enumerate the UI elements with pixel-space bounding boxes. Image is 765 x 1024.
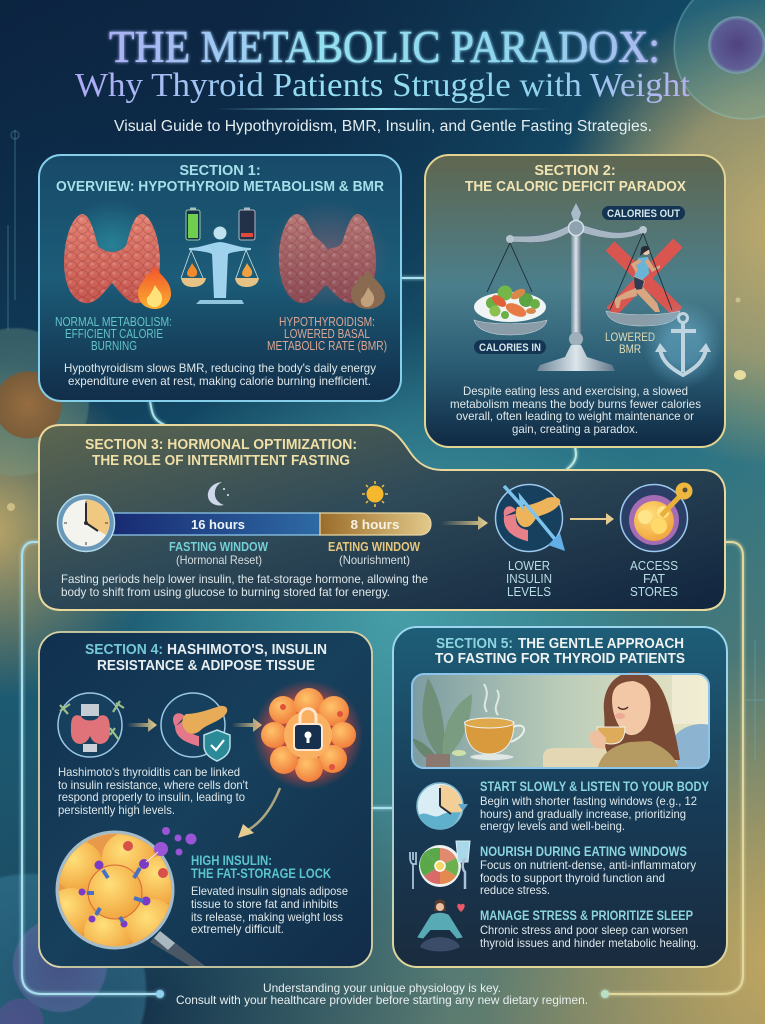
callout: high insulin: THE FAT-STORAGE LOCK bbox=[191, 866, 331, 881]
section 4 body text: to insulin resistance, where cells don't bbox=[58, 778, 249, 792]
title: Why Thyroid Patients Struggle with Weight bbox=[75, 67, 691, 104]
section 2 body text: overall, often leading to weight maintenance or bbox=[456, 409, 694, 423]
arrow bbox=[232, 718, 262, 732]
illustration: woman sipping tea bbox=[412, 672, 709, 768]
text: manage stress: thyroid issues and hinder metabolic healing. bbox=[480, 936, 699, 950]
section 2 body text: metabolism means the body burns fewer calories bbox=[450, 397, 701, 411]
panel: section 3 intermittent fasting bbox=[39, 425, 725, 610]
text: nourish: Focus on nutrient-dense, anti-inflammatory bbox=[480, 858, 696, 872]
section 4 heading: RESISTANCE & ADIPOSE TISSUE bbox=[97, 658, 315, 674]
label: lower insulin levels: LEVELS bbox=[507, 584, 551, 599]
text: manage stress bbox=[480, 908, 699, 950]
section 4 heading: HASHIMOTO'S, INSULIN bbox=[167, 642, 327, 658]
footer note bbox=[176, 981, 588, 1007]
label: lower insulin levels: INSULIN bbox=[506, 571, 552, 586]
text: start slowly bbox=[480, 779, 709, 833]
section 5 heading: TO FASTING FOR THYROID PATIENTS bbox=[435, 651, 685, 667]
plant bbox=[412, 678, 472, 768]
arrow: curved down to lens bbox=[238, 788, 280, 838]
footer note: Understanding your unique physiology is key. bbox=[263, 981, 501, 995]
label: fasting window bbox=[169, 540, 268, 567]
text: nourish: NOURISH DURING EATING WINDOWS bbox=[480, 844, 687, 859]
icon: pancreas with falling arrow bbox=[496, 484, 565, 552]
icon: salad bowl bbox=[474, 286, 546, 322]
label: lowered bmr: BMR bbox=[619, 342, 641, 356]
icon: meditation with heart bbox=[418, 900, 465, 952]
label: hypothyroidism: METABOLIC RATE (BMR) bbox=[267, 339, 387, 353]
panel: section 5 gentle approach bbox=[393, 627, 727, 967]
label: access fat stores: ACCESS bbox=[630, 558, 678, 573]
section 4 heading: SECTION 4: bbox=[85, 642, 163, 658]
text: manage stress: Chronic stress and poor sleep can worsen bbox=[480, 923, 688, 937]
label: hypothyroidism: HYPOTHYROIDISM: bbox=[279, 315, 375, 329]
label: eating window: (Nourishment) bbox=[339, 553, 410, 567]
panel: section 2 caloric deficit bbox=[425, 155, 725, 447]
label: lower insulin levels bbox=[506, 558, 552, 599]
text: nourish bbox=[480, 844, 696, 897]
label: hypothyroidism bbox=[267, 315, 387, 353]
section 1 body text: Hypothyroidism slows BMR, reducing the body's daily energy bbox=[64, 361, 376, 375]
label: normal metabolism: EFFICIENT CALORIE bbox=[65, 327, 163, 341]
illustration: magnified fat cells with insulin bbox=[47, 827, 205, 966]
text: nourish: foods to support thyroid function and bbox=[480, 871, 665, 885]
label: eating window: EATING WINDOW bbox=[328, 540, 420, 554]
label: access fat stores bbox=[630, 558, 678, 599]
icon: metabolism balance figure with batteries bbox=[181, 208, 259, 304]
section 4 heading bbox=[85, 642, 327, 674]
label: normal metabolism bbox=[55, 315, 172, 353]
section 2 heading: SECTION 2: bbox=[534, 163, 616, 179]
label: lowered bmr bbox=[605, 330, 655, 356]
fasting timeline bar: 16 hours bbox=[191, 517, 245, 532]
icon: fat cell with key bbox=[620, 482, 692, 552]
section 1 heading bbox=[56, 163, 384, 195]
section 3 body text: body to shift from using glucose to burning stored fat for energy. bbox=[61, 585, 390, 599]
icon: anchor bbox=[643, 301, 723, 389]
section 1 heading: OVERVIEW: HYPOTHYROID METABOLISM & BMR bbox=[56, 179, 384, 195]
arrow bbox=[127, 718, 157, 732]
callout: high insulin bbox=[191, 853, 348, 936]
circuit connector lines bbox=[22, 278, 743, 998]
text: start slowly: energy levels and well-being. bbox=[480, 819, 625, 833]
text: nourish: reduce stress. bbox=[480, 883, 550, 897]
section 1 heading: SECTION 1: bbox=[179, 163, 261, 179]
section 3 heading: THE ROLE OF INTERMITTENT FASTING bbox=[92, 453, 350, 469]
icon: hypothyroid gland with dim flame bbox=[266, 200, 390, 310]
section 4 body text bbox=[58, 765, 249, 817]
section 4 body text: Hashimoto's thyroiditis can be linked bbox=[58, 765, 240, 779]
section 4 body text: persistently high levels. bbox=[58, 803, 175, 817]
icon: red x and runner bbox=[610, 243, 678, 312]
subtitle: Visual Guide to Hypothyroidism, BMR, Insulin, and Gentle Fasting Strategies. bbox=[114, 118, 652, 135]
section 3 heading bbox=[85, 437, 357, 469]
icon: locked fat cells bbox=[253, 680, 363, 790]
icon: pancreas with shield bbox=[161, 693, 230, 761]
label: fasting window: FASTING WINDOW bbox=[169, 540, 268, 554]
callout: high insulin: tissue to store fat and inhibits bbox=[191, 897, 338, 911]
footer note: Consult with your healthcare provider before starting any new dietary regimen. bbox=[176, 993, 588, 1007]
icon: moon bbox=[208, 482, 229, 506]
section 3 body text bbox=[61, 572, 428, 599]
fasting timeline bar: 8 hours bbox=[350, 517, 400, 532]
panel: section 1 overview bbox=[39, 155, 401, 401]
title: THE METABOLIC PARADOX: bbox=[109, 22, 660, 72]
section 1 body text: expenditure even at rest, making calorie burning inefficient. bbox=[68, 374, 371, 388]
section 2 body text: gain, creating a paradox. bbox=[512, 422, 638, 436]
teacup on saucer bbox=[452, 684, 524, 760]
section 1 body text bbox=[64, 361, 376, 388]
callout: high insulin: extremely difficult. bbox=[191, 922, 284, 936]
section 4 body text: respond properly to insulin, leading to bbox=[58, 790, 245, 804]
fasting timeline bar bbox=[112, 513, 431, 535]
section 3 heading: SECTION 3: HORMONAL OPTIMIZATION: bbox=[85, 437, 357, 453]
woman bbox=[589, 672, 680, 767]
label pill: calories out: CALORIES OUT bbox=[607, 208, 680, 220]
callout: high insulin: its release, making weight loss bbox=[191, 910, 343, 924]
label: normal metabolism: NORMAL METABOLISM: bbox=[55, 315, 172, 329]
callout: high insulin: HIGH INSULIN: bbox=[191, 853, 272, 868]
label: hypothyroidism: LOWERED BASAL bbox=[284, 327, 370, 341]
icon: thyroid under antibody attack bbox=[58, 693, 124, 757]
title bbox=[75, 22, 691, 104]
text: start slowly: Begin with shorter fasting windows (e.g., 12 bbox=[480, 794, 697, 808]
icon: healthy plate bbox=[410, 841, 470, 889]
arrow: insulin to fat bbox=[570, 513, 614, 525]
icon: clock with water bbox=[417, 783, 468, 829]
label: eating window bbox=[328, 540, 420, 567]
section 2 body text: Despite eating less and exercising, a slowed bbox=[463, 384, 688, 398]
icon: clock bbox=[58, 494, 114, 552]
callout: high insulin: Elevated insulin signals adipose bbox=[191, 884, 348, 898]
label: access fat stores: FAT bbox=[643, 571, 665, 586]
text: start slowly: hours) and gradually increase, prioritizing bbox=[480, 807, 686, 821]
section 2 heading bbox=[465, 163, 686, 195]
text: start slowly: START SLOWLY & LISTEN TO YOUR BODY bbox=[480, 779, 709, 794]
icon: balance scale bbox=[474, 203, 680, 371]
label: access fat stores: STORES bbox=[630, 584, 678, 599]
icon: sun bbox=[362, 481, 388, 507]
icon: healthy thyroid with flame bbox=[62, 200, 171, 309]
label: lower insulin levels: LOWER bbox=[508, 558, 550, 573]
section 5 heading bbox=[435, 636, 685, 667]
label: lowered bmr: LOWERED bbox=[605, 330, 655, 344]
label pill: calories in: CALORIES IN bbox=[479, 342, 541, 354]
text: manage stress: MANAGE STRESS & PRIORITIZE SLEEP bbox=[480, 908, 693, 923]
section 2 body text bbox=[450, 384, 701, 436]
section 5 heading: THE GENTLE APPROACH bbox=[518, 636, 684, 652]
section 2 heading: THE CALORIC DEFICIT PARADOX bbox=[465, 179, 686, 195]
label: fasting window: (Hormonal Reset) bbox=[176, 553, 262, 567]
arrow: timeline to insulin bbox=[441, 516, 488, 530]
section 5 heading: SECTION 5: bbox=[436, 636, 513, 652]
section 3 body text: Fasting periods help lower insulin, the fat-storage hormone, allowing the bbox=[61, 572, 428, 586]
label: normal metabolism: BURNING bbox=[91, 339, 137, 353]
panel: section 4 hashimoto's bbox=[39, 632, 372, 967]
